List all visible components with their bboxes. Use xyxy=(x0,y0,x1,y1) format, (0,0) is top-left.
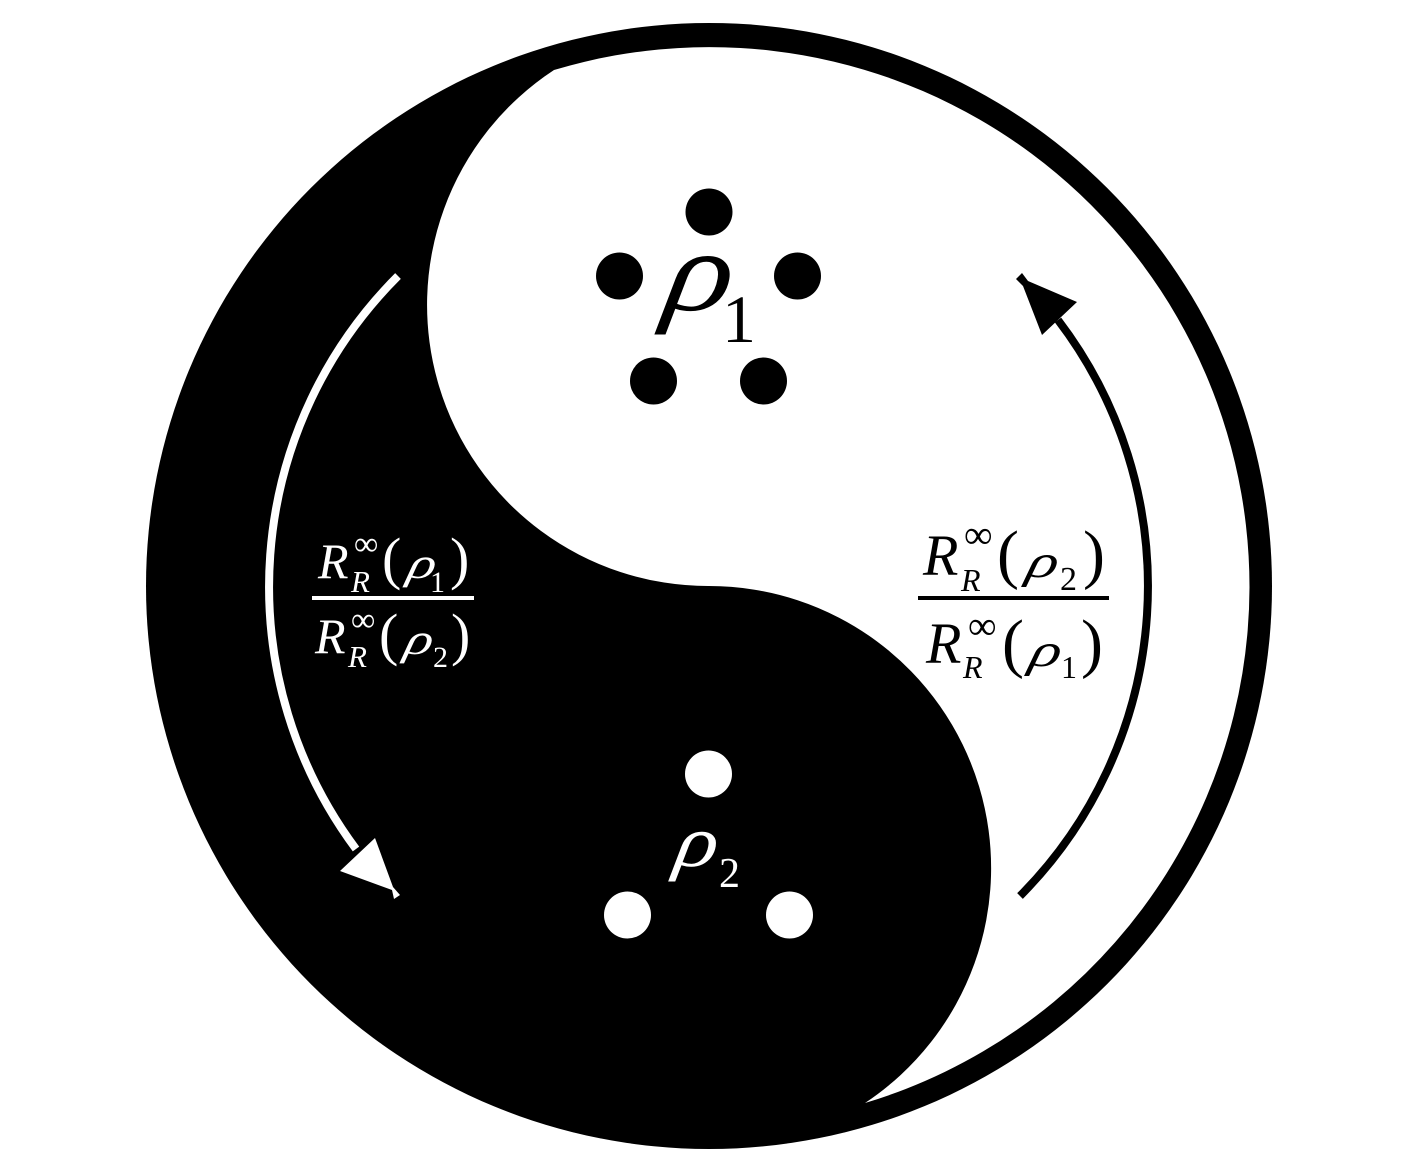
right ratio formula: ( xyxy=(1002,607,1024,680)
left ratio formula: R xyxy=(314,608,346,664)
left ratio formula: ( xyxy=(379,602,398,667)
right ratio formula: R xyxy=(960,562,981,598)
right ratio formula: R xyxy=(922,523,958,588)
right ratio formula: ) xyxy=(1081,607,1103,680)
right ratio formula xyxy=(918,512,1109,685)
three white dots around rho 2 xyxy=(604,750,813,938)
label: rho 2 xyxy=(667,801,740,897)
right ratio formula: ) xyxy=(1083,518,1105,591)
right ratio formula: ∞ xyxy=(968,603,997,648)
label: rho 2: ρ xyxy=(667,801,726,882)
left ratio formula: R xyxy=(347,639,367,674)
label: rho 1: 1 xyxy=(722,281,756,357)
left ratio formula: 1 xyxy=(430,566,445,599)
left ratio formula: ∞ xyxy=(354,526,378,563)
label: rho 2: 2 xyxy=(719,851,740,897)
yin-yang disc xyxy=(146,23,1272,1149)
right ratio formula: 1 xyxy=(1061,649,1077,685)
right ratio formula: ρ xyxy=(1023,625,1068,677)
right ratio formula: ∞ xyxy=(964,512,993,557)
right ratio formula: R xyxy=(925,611,961,676)
black arrow: rho 2 to rho 1 xyxy=(1016,273,1148,896)
right ratio formula: R xyxy=(962,649,983,685)
left ratio formula xyxy=(312,526,474,674)
right ratio formula: ( xyxy=(997,518,1019,591)
left ratio formula: ) xyxy=(450,526,469,591)
left ratio formula: R xyxy=(350,564,370,599)
right ratio formula: ρ xyxy=(1020,536,1065,588)
label: rho 1: ρ xyxy=(653,207,746,335)
five black dots around rho 1 xyxy=(596,188,821,404)
left ratio formula: ρ xyxy=(398,616,439,664)
left ratio formula: 2 xyxy=(433,641,448,674)
left ratio formula: ( xyxy=(382,526,401,591)
white arrow: rho 1 to rho 2 xyxy=(269,276,400,899)
left ratio formula: ∞ xyxy=(351,602,375,639)
right ratio formula: 2 xyxy=(1060,561,1077,598)
left ratio formula: ) xyxy=(451,602,470,667)
left ratio formula: ρ xyxy=(401,540,442,588)
left ratio formula: R xyxy=(317,533,349,589)
